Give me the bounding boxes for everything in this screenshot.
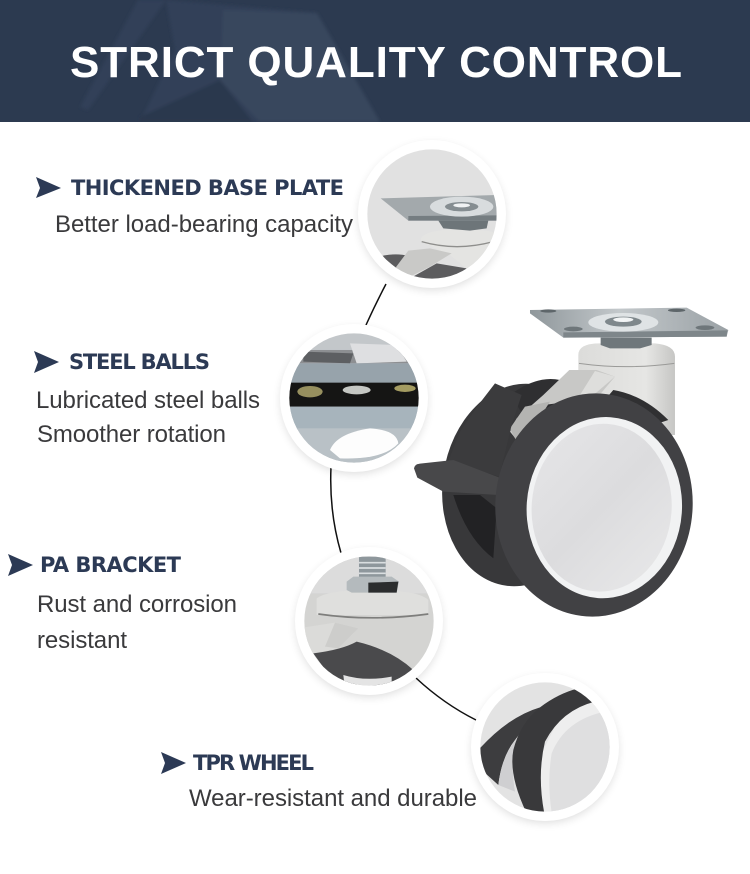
label: thickened base plate: Better load-bearing capacity [55,211,353,238]
label: TPR wheel: TPR WHEEL [193,751,314,775]
inset: PA bracket [295,547,443,696]
label: thickened base plate: THICKENED BASE PLATE [71,176,344,200]
inset: steel balls [280,324,428,473]
inset: TPR wheel [471,673,619,822]
label: PA bracket: PA BRACKET [40,553,182,577]
label: TPR wheel [161,751,477,812]
label: steel balls: Lubricated steel balls [36,387,260,414]
label: steel balls [34,350,260,448]
caster product photo [414,308,728,623]
header banner [0,0,750,122]
connector lines [331,284,476,720]
label: PA bracket: resistant [37,627,127,654]
label: TPR wheel: Wear-resistant and durable [189,785,477,812]
label: PA bracket: Rust and corrosion [37,591,237,618]
label: steel balls: STEEL BALLS [69,350,210,374]
label: thickened base plate [36,176,353,238]
label: PA bracket [8,553,237,654]
inset: thickened base plate [358,140,506,289]
label: steel balls: Smoother rotation [37,421,226,448]
title: STRICT QUALITY CONTROL [70,38,682,87]
